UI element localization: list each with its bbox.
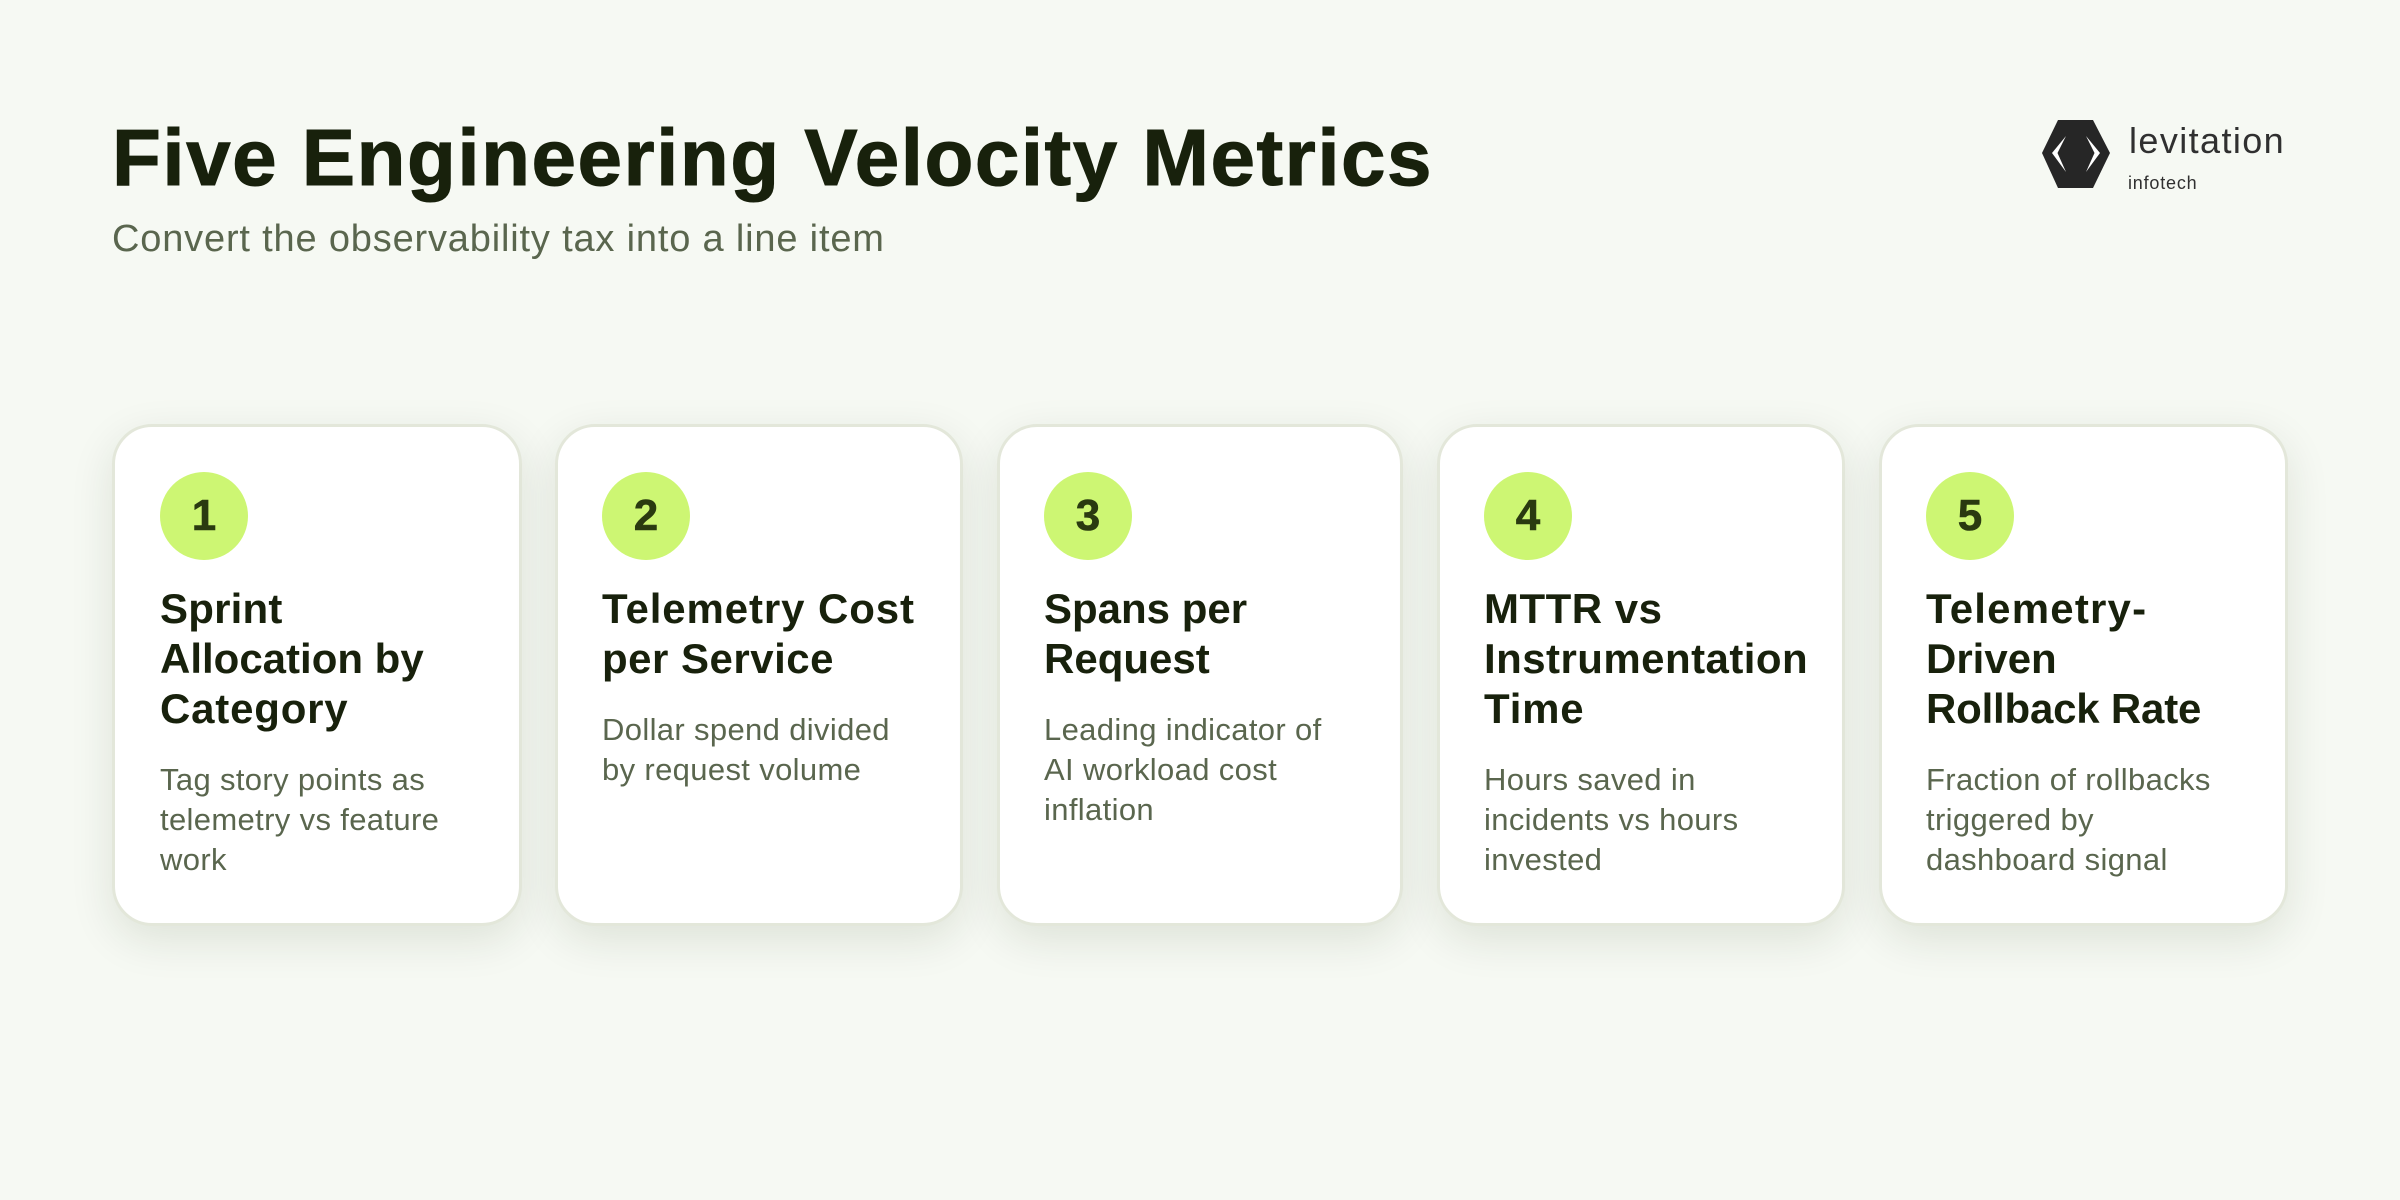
description: triggered by — [1926, 802, 2094, 837]
description: AI workload cost — [1044, 752, 1277, 787]
heading: Telemetry- — [1926, 585, 2147, 632]
description — [160, 762, 439, 877]
heading — [160, 585, 424, 732]
heading: Rollback Rate — [1926, 685, 2201, 732]
description: Tag story points as — [160, 762, 425, 797]
panel: card 2 — [555, 424, 963, 926]
number 3: 3 — [1076, 491, 1100, 540]
description — [1044, 712, 1322, 827]
description: inflation — [1044, 792, 1154, 827]
number 5 — [1926, 472, 2014, 560]
number 5: 5 — [1958, 491, 1982, 540]
heading: Allocation by — [160, 635, 424, 682]
description: Dollar spend divided — [602, 712, 890, 747]
heading: Instrumentation — [1484, 635, 1808, 682]
logo: infotech — [2128, 173, 2197, 193]
heading: Category — [160, 685, 348, 732]
description: dashboard signal — [1926, 842, 2168, 877]
heading — [602, 585, 915, 682]
heading: Time — [1484, 685, 1584, 732]
heading: Sprint — [160, 585, 283, 632]
number 2 — [602, 472, 690, 560]
description: by request volume — [602, 752, 861, 787]
description: invested — [1484, 842, 1602, 877]
panel: card 3 — [997, 424, 1403, 926]
heading: Request — [1044, 635, 1210, 682]
heading: per Service — [602, 635, 834, 682]
number 3 — [1044, 472, 1132, 560]
logo: levitation — [2129, 120, 2285, 161]
heading — [1926, 585, 2201, 732]
title: Five Engineering Velocity Metrics — [112, 113, 1433, 202]
description: work — [160, 842, 227, 877]
description: incidents vs hours — [1484, 802, 1738, 837]
subtitle: Convert the observability tax into a line item — [112, 218, 885, 260]
logo — [2042, 120, 2285, 193]
panel: card 4 — [1437, 424, 1845, 926]
panel: card 1 — [112, 424, 522, 926]
description — [1484, 762, 1738, 877]
description — [1926, 762, 2211, 877]
number 1 — [160, 472, 248, 560]
number 1: 1 — [192, 491, 216, 540]
number 4: 4 — [1516, 491, 1540, 540]
description: telemetry vs feature — [160, 802, 439, 837]
heading: Telemetry Cost — [602, 585, 915, 632]
heading: Driven — [1926, 635, 2057, 682]
description — [602, 712, 890, 787]
number 2: 2 — [634, 491, 658, 540]
heading — [1044, 585, 1247, 682]
panel: card 5 — [1879, 424, 2288, 926]
heading — [1484, 585, 1808, 732]
description: Leading indicator of — [1044, 712, 1322, 747]
heading: Spans per — [1044, 585, 1247, 632]
heading: MTTR vs — [1484, 585, 1663, 632]
number 4 — [1484, 472, 1572, 560]
description: Hours saved in — [1484, 762, 1696, 797]
description: Fraction of rollbacks — [1926, 762, 2211, 797]
